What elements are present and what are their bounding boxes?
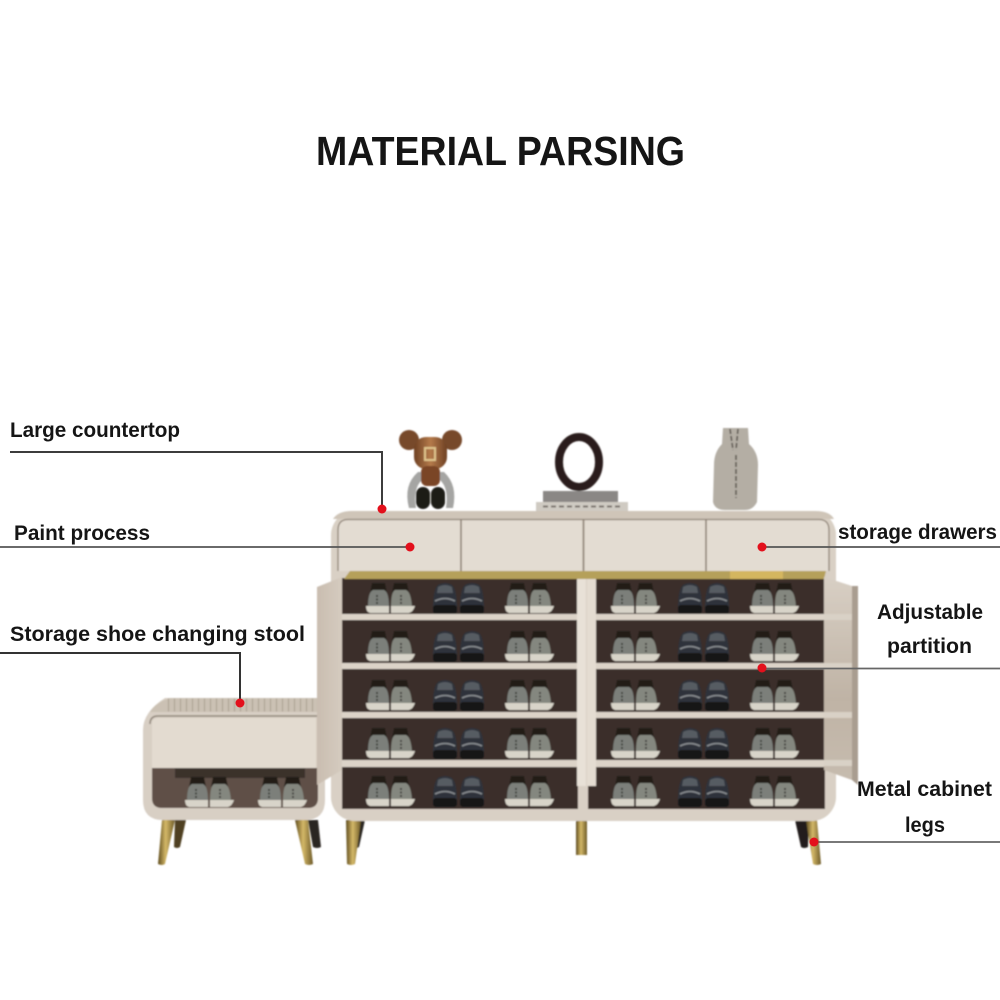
stool legs	[158, 820, 321, 865]
ornament: bear	[399, 430, 462, 509]
callout: storage stool	[0, 623, 305, 708]
callout: adjustable partition: partition	[887, 635, 972, 658]
callout: adjustable partition	[758, 601, 1000, 672]
left open door	[317, 577, 342, 785]
cabinet	[317, 511, 858, 865]
shoes left	[366, 583, 554, 807]
callout: adjustable partition: Adjustable	[877, 601, 983, 624]
compartment right	[588, 578, 825, 809]
callout: storage stool: Storage shoe changing stool	[10, 623, 305, 646]
callout: storage drawers	[758, 521, 1000, 552]
centre doors	[577, 579, 596, 786]
callout: large countertop	[10, 419, 386, 514]
stool	[143, 698, 325, 865]
furniture illustration	[143, 428, 858, 865]
callout: paint process: Paint process	[14, 522, 150, 545]
stool ribbed top	[150, 698, 318, 712]
shelves	[342, 614, 826, 767]
callout: large countertop: Large countertop	[10, 419, 180, 442]
cabinet body	[331, 511, 836, 821]
countertop	[333, 511, 834, 519]
callout: metal cabinet legs	[810, 778, 1000, 846]
callout: paint process	[0, 522, 414, 552]
drawers	[338, 520, 829, 571]
title: MATERIAL PARSING	[316, 128, 685, 174]
stool body	[143, 698, 325, 820]
ornament: ring on books	[536, 437, 628, 511]
compartment left	[342, 578, 578, 809]
gold strip	[344, 571, 826, 579]
stool drawer	[152, 718, 316, 768]
ornament: vase	[713, 428, 758, 510]
callout: metal cabinet legs: legs	[905, 814, 945, 837]
cabinet legs	[346, 820, 821, 865]
right open door	[824, 577, 858, 785]
shoes right	[611, 583, 799, 807]
stool open shelf	[152, 768, 318, 808]
callout: storage drawers: storage drawers	[838, 521, 997, 544]
callout: metal cabinet legs: Metal cabinet	[857, 778, 992, 801]
